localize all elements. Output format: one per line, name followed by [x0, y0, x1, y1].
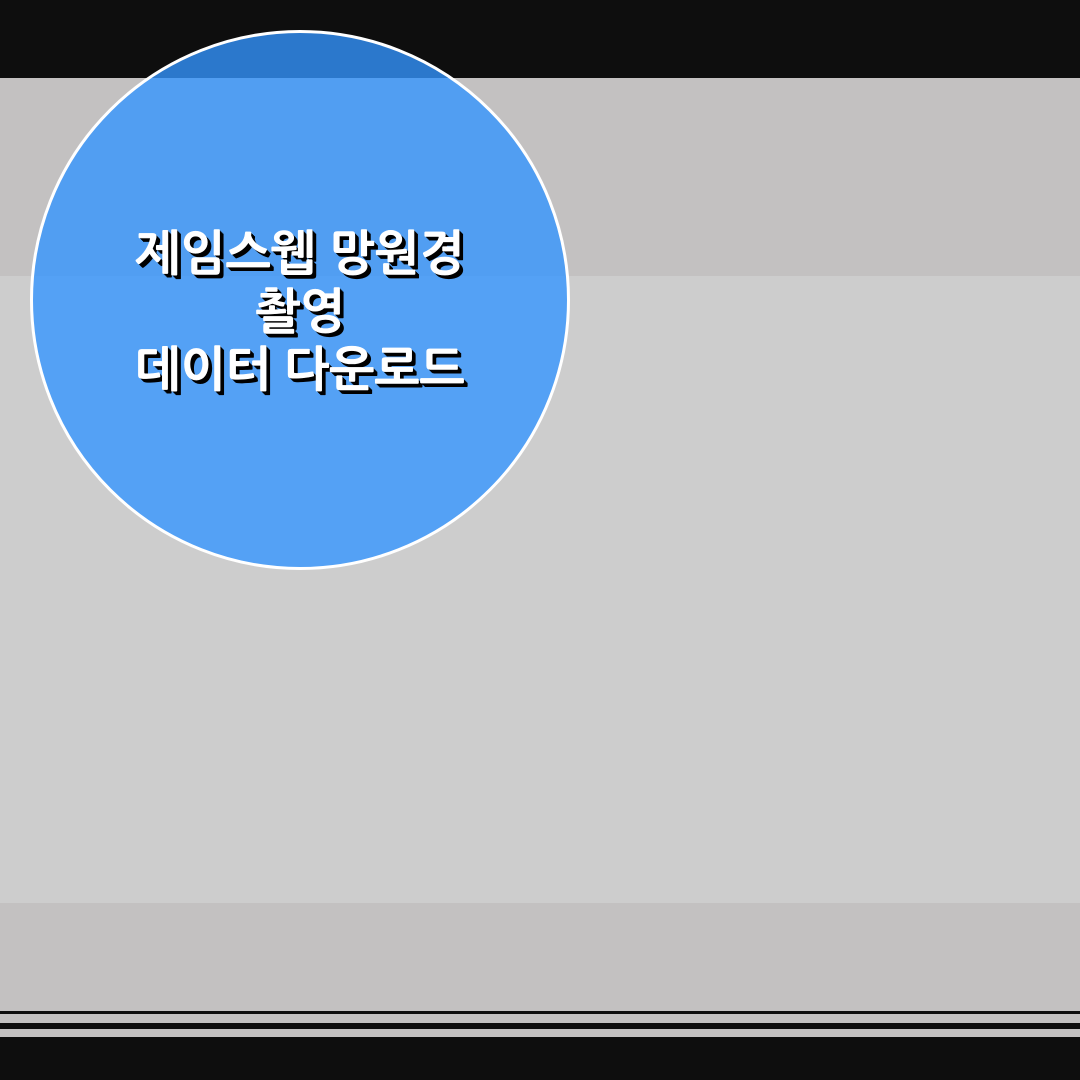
upper grey band	[0, 78, 1080, 276]
lower grey band	[0, 903, 1080, 1011]
title: 촬영	[255, 286, 345, 339]
main light grey panel	[0, 276, 1080, 903]
top black band	[0, 0, 1080, 78]
title	[135, 228, 468, 397]
title: 제임스웹 망원경	[135, 228, 465, 281]
blue circle badge	[30, 30, 570, 570]
title: 데이터 다운로드	[135, 344, 465, 397]
bottom stripes	[0, 1011, 1080, 1080]
